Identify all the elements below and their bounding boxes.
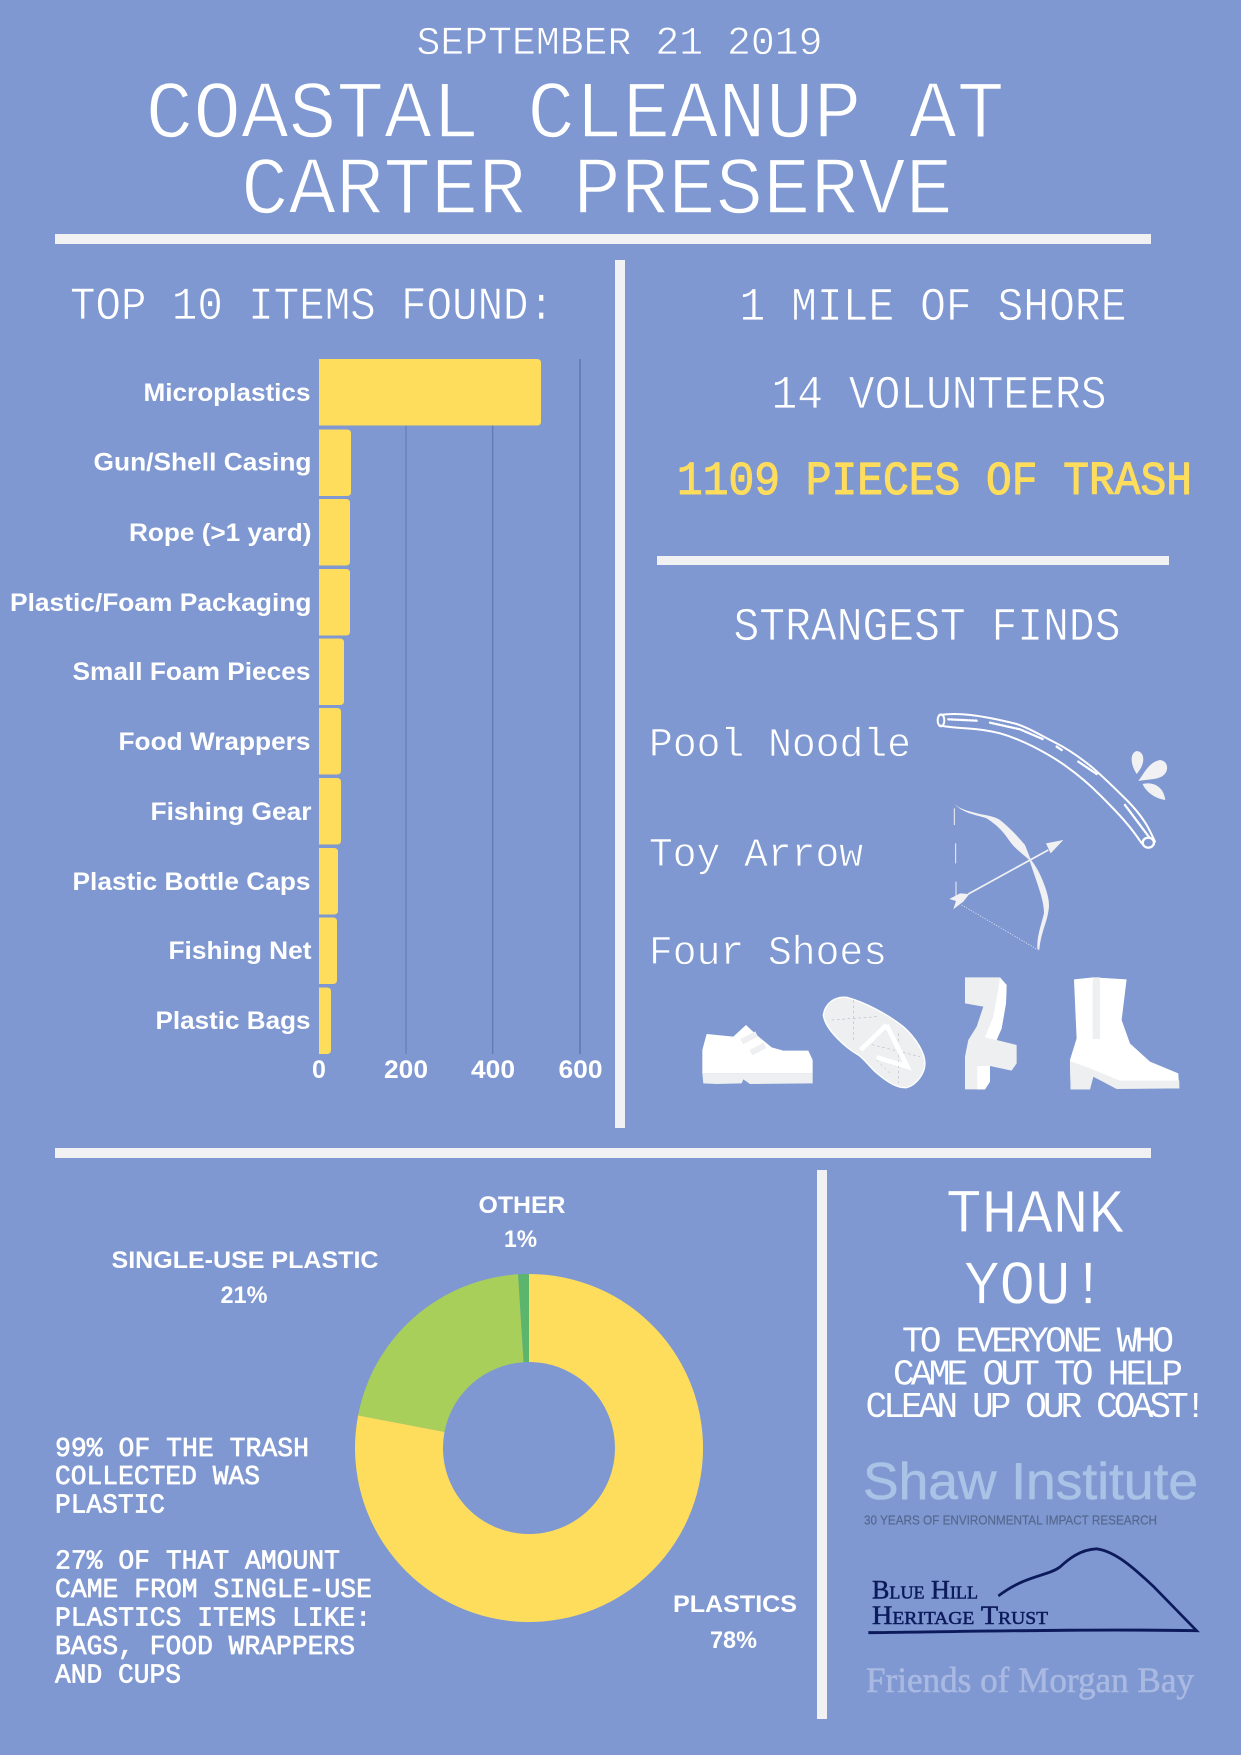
logo: Blue Hill Heritage Trust [868,1549,1197,1633]
slice: other 1% [518,1274,529,1362]
icons: pool noodle, water drops and bow [938,714,1167,950]
text block: plastic summary: PLASTICS ITEMS LIKE: [55,1604,371,1634]
text block: plastic summary: AND CUPS [55,1662,181,1692]
category labels [10,379,312,1035]
logo: Blue Hill Heritage Trust: Blue Hill [872,1576,978,1604]
stat: volunteers: 14 VOLUNTEERS [772,370,1106,423]
thank you message: TO EVERYONE WHO [902,1322,1174,1362]
thank you message [866,1322,1206,1428]
label: plastics: PLASTICS [673,1591,797,1618]
bars [319,359,541,1054]
text block: plastic summary: CAME FROM SINGLE-USE [55,1576,372,1606]
logo: Blue Hill Heritage Trust: Heritage Trust [872,1601,1048,1630]
date: SEPTEMBER 21 2019 [416,22,822,67]
label: other: 1% [504,1226,537,1253]
category labels: Small Foam Pieces [72,658,310,686]
heading: strangest finds: STRANGEST FINDS [734,602,1120,655]
donut chart: trash composition [112,1192,797,1654]
stat: pieces of trash: 1109 PIECES OF TRASH [677,456,1192,509]
text block: plastic summary: BAGS, FOOD WRAPPERS [55,1633,355,1663]
thank you message: CLEAN UP OUR COAST! [866,1387,1206,1428]
label: other: OTHER [478,1192,566,1219]
stat: miles of shore: 1 MILE OF SHORE [740,282,1126,335]
slice: single-use plastic 21% [358,1274,524,1432]
icon: pool noodle [938,714,1155,848]
icon: bow and arrow [949,803,1063,950]
icon: shoe [702,1025,813,1084]
label: single-use plastic [112,1247,378,1309]
category labels: Fishing Gear [150,798,312,826]
icon: water drops [1132,751,1167,800]
axis labels: 200 [384,1056,428,1084]
axis labels: 400 [471,1056,515,1084]
thank you message: CAME OUT TO HELP [893,1354,1183,1396]
icon: boot [1070,977,1179,1089]
title [146,69,1004,238]
logo: Shaw Institute: 30 YEARS OF ENVIRONMENTAL IMPACT RESEARCH [864,1512,1157,1528]
category labels: Plastic Bottle Caps [72,868,310,896]
title: COASTAL CLEANUP AT [146,69,1004,162]
icon: sandal [823,997,925,1088]
text block: plastic summary: 27% OF THAT AMOUNT [55,1548,340,1578]
thank you heading: THANK [946,1180,1125,1251]
icon: heeled shoe [965,977,1017,1089]
axis labels: 0 [312,1056,326,1084]
icons: four shoes [702,977,1179,1089]
slice: plastics 78% [355,1274,703,1622]
label: pool noodle: Pool Noodle [649,723,911,769]
axis labels [312,1056,602,1084]
text block: plastic summary: COLLECTED WAS [55,1463,260,1493]
category labels: Plastic Bags [156,1007,310,1035]
logo: Friends of Morgan Bay: Friends of Morgan Bay [866,1660,1194,1700]
axis labels: 600 [558,1056,602,1084]
heading: top 10 items: TOP 10 ITEMS FOUND: [70,281,554,333]
label: plastics: 78% [710,1627,757,1654]
label: single-use plastic: 21% [220,1282,268,1309]
title: CARTER PRESERVE [241,145,953,238]
label: toy arrow: Toy Arrow [649,833,863,879]
category labels: Fishing Net [168,937,312,965]
label: four shoes: Four Shoes [649,931,887,977]
category labels: Food Wrappers [118,728,310,756]
text block: plastic summary: 99% OF THE TRASH [55,1435,309,1465]
category labels: Gun/Shell Casing [94,448,312,476]
category labels: Plastic/Foam Packaging [10,589,312,617]
category labels: Rope (>1 yard) [129,519,312,547]
thank you heading [946,1180,1125,1322]
label: other [478,1192,566,1253]
label: single-use plastic: SINGLE-USE PLASTIC [112,1247,378,1274]
logo: Shaw Institute: Shaw Institute [863,1453,1198,1511]
text block: plastic summary [55,1435,372,1692]
text block: plastic summary: PLASTIC [55,1492,165,1522]
thank you heading: YOU! [964,1252,1106,1322]
label: plastics [673,1591,797,1654]
bar chart: top 10 items found [10,359,602,1084]
category labels: Microplastics [144,379,310,407]
